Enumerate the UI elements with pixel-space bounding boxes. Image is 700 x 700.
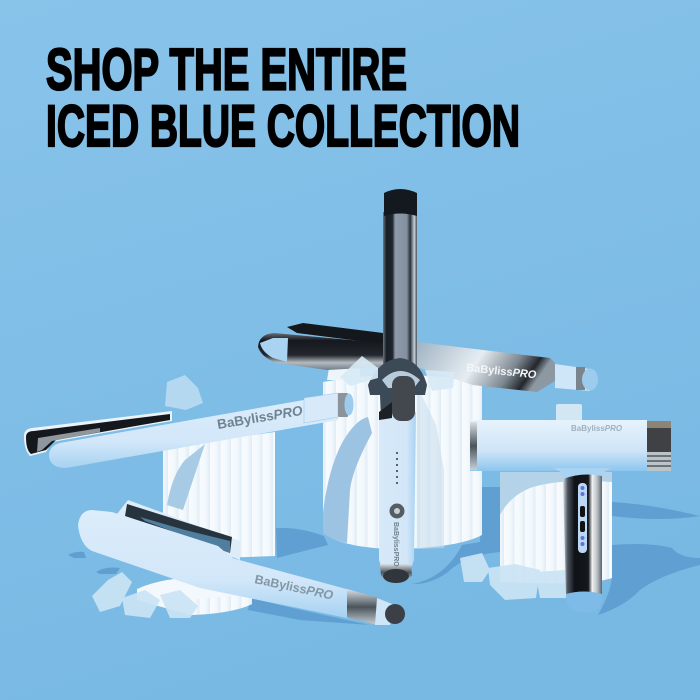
product: straightener left xyxy=(24,393,354,468)
floor shadows xyxy=(68,487,700,625)
logo on wide straightener: BaBylissPRO xyxy=(253,572,335,603)
pedestal: low disc xyxy=(137,577,252,615)
ice cube: top of left pedestal xyxy=(165,375,203,410)
logo on dryer: BaBylissPRO xyxy=(571,424,623,433)
ice cubes front right xyxy=(460,553,566,600)
pedestal: right xyxy=(500,404,612,583)
pedestal: center back xyxy=(323,360,482,549)
product: wide straightener front xyxy=(78,500,405,625)
logo on back straightener: BaBylissPRO xyxy=(466,362,537,381)
logo on left straightener: BaBylissPRO xyxy=(216,403,304,432)
product: curling iron vertical xyxy=(368,189,427,583)
title: SHOP THE ENTIRE xyxy=(46,38,407,102)
ice cubes on center pedestal xyxy=(340,356,455,391)
pedestal: left xyxy=(163,432,275,560)
ice cubes front left xyxy=(92,572,198,618)
product: curling iron vertical: BaByliss PRO xyxy=(392,522,399,567)
product: straightener back horizontal xyxy=(258,323,598,392)
title xyxy=(46,38,520,159)
product: hair dryer xyxy=(470,420,671,613)
